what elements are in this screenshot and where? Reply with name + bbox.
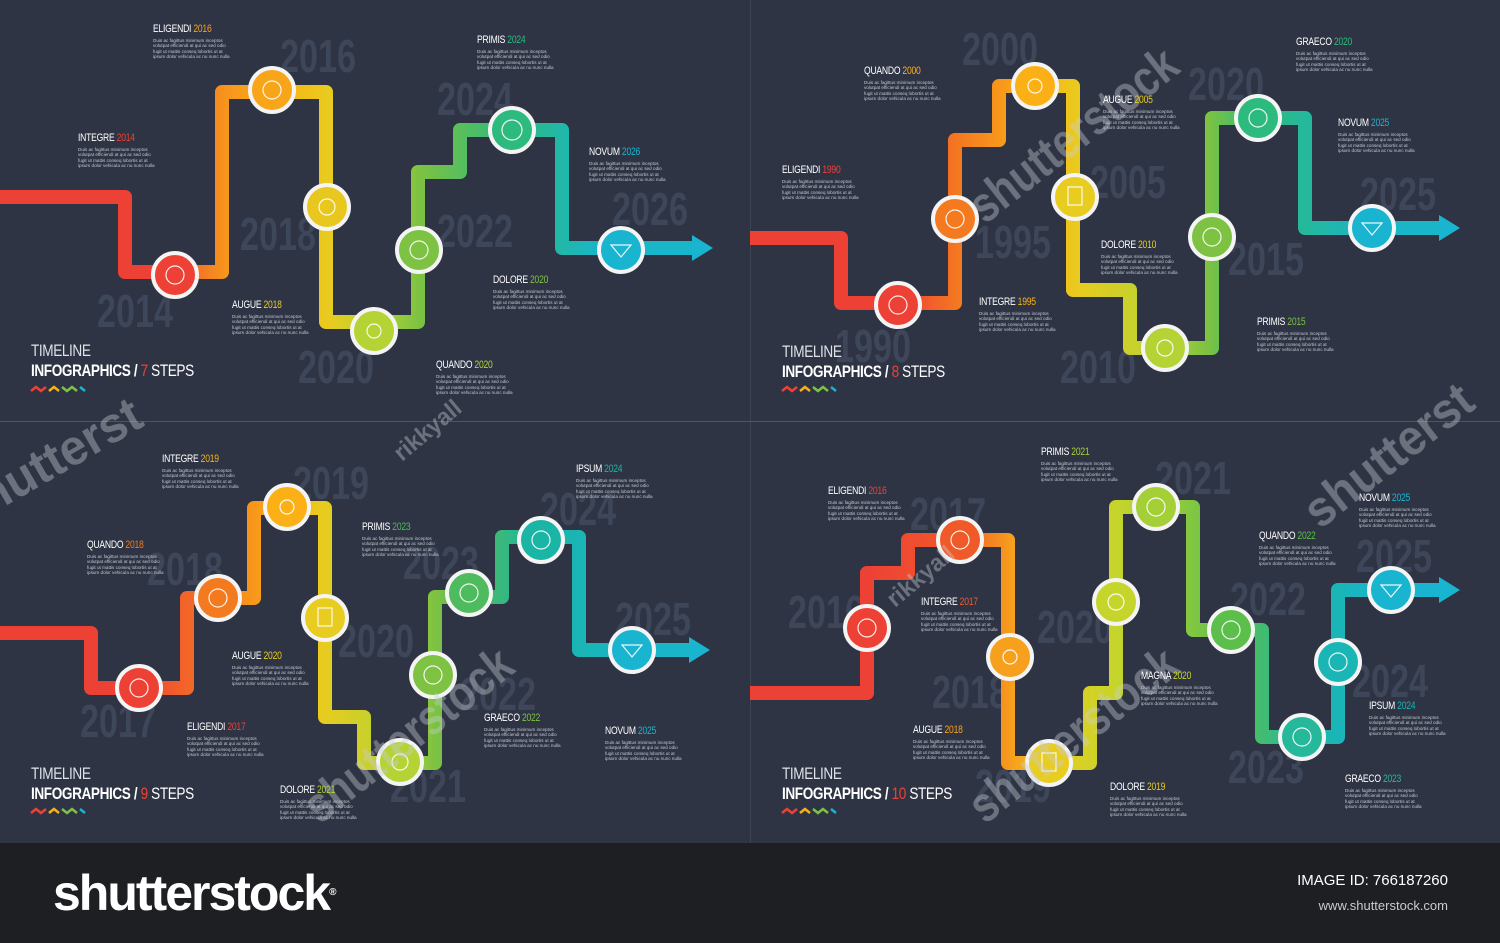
text: Duis ac fagittus minimum inceptos volutpat efficiendi at qui ac sed odio fugit ut mattis conseq lobortis ut at ipsum dolor vehicula ac nu nunc nulla xyxy=(1141,685,1218,706)
ghost years: 2023 xyxy=(1228,741,1304,793)
path: panel 4 timeline xyxy=(750,507,1460,763)
panel 3 text blocks xyxy=(87,453,682,820)
text: Duis ac fagittus minimum inceptos volutpat efficiendi at qui ac sed odio fugit ut mattis conseq lobortis ut at ipsum dolor vehicula ac nu nunc nulla xyxy=(232,314,309,335)
text: Duis ac fagittus minimum inceptos volutpat efficiendi at qui ac sed odio fugit ut mattis conseq lobortis ut at ipsum dolor vehicula ac nu nunc nulla xyxy=(1369,715,1446,736)
ghost years: 2005 xyxy=(1090,156,1166,208)
watermarks: shutterst xyxy=(1292,371,1485,539)
text: Duis ac fagittus minimum inceptos volutpat efficiendi at qui ac sed odio fugit ut mattis conseq lobortis ut at ipsum dolor vehicula ac nu nunc nulla xyxy=(1259,545,1336,566)
logo: shutterstock® xyxy=(53,865,334,921)
circle icons xyxy=(130,79,1401,771)
ghost years: 2018 xyxy=(240,208,316,260)
panel titles xyxy=(31,341,952,803)
panel 1 text blocks xyxy=(78,23,666,395)
text: AUGUE 2018 xyxy=(232,299,282,311)
ghost years: 2020 xyxy=(298,341,374,393)
text: Duis ac fagittus minimum inceptos volutpat efficiendi at qui ac sed odio fugit ut mattis conseq lobortis ut at ipsum dolor vehicula ac nu nunc nulla xyxy=(484,727,561,748)
ghost years: 2026 xyxy=(612,183,688,235)
text: IPSUM 2024 xyxy=(576,463,622,475)
text: Duis ac fagittus minimum inceptos volutpat efficiendi at qui ac sed odio fugit ut mattis conseq lobortis ut at ipsum dolor vehicula ac nu nunc nulla xyxy=(1257,331,1334,352)
text: AUGUE 2018 xyxy=(913,724,963,736)
text: Duis ac fagittus minimum inceptos volutpat efficiendi at qui ac sed odio fugit ut mattis conseq lobortis ut at ipsum dolor vehicula ac nu nunc nulla xyxy=(605,740,682,761)
ghost years: 2018 xyxy=(147,543,223,595)
watermarks: shutterstock xyxy=(292,636,524,834)
ghost years: 2021 xyxy=(1155,452,1231,504)
text: PRIMIS 2021 xyxy=(1041,446,1089,458)
ghost years: 2025 xyxy=(1356,530,1432,582)
ghost years: 2022 xyxy=(1230,573,1306,625)
text: DOLORE 2021 xyxy=(280,784,335,796)
ghost years: 2018 xyxy=(932,666,1008,718)
ghost years: 2025 xyxy=(1360,168,1436,220)
text: Duis ac fagittus minimum inceptos volutpat efficiendi at qui ac sed odio fugit ut mattis conseq lobortis ut at ipsum dolor vehicula ac nu nunc nulla xyxy=(1296,51,1373,72)
image id: IMAGE ID: 766187260 xyxy=(1297,872,1448,889)
text: ELIGENDI 2016 xyxy=(153,23,212,35)
ghost years: 2023 xyxy=(403,537,479,589)
text: NOVUM 2026 xyxy=(589,146,640,158)
ghost years: 2024 xyxy=(1352,655,1428,707)
ghost years: 2017 xyxy=(80,695,156,747)
ghost years xyxy=(80,23,1436,812)
text: GRAECO 2022 xyxy=(484,712,540,724)
ghost years: 2025 xyxy=(615,593,691,645)
text: INTEGRE 2019 xyxy=(162,453,219,465)
step circles xyxy=(117,64,1413,785)
footer bar xyxy=(0,843,1500,943)
text: TIMELINE xyxy=(782,764,842,783)
website: www.shutterstock.com xyxy=(1319,898,1448,913)
ghost years: 2016 xyxy=(280,30,356,82)
ghost years: 2024 xyxy=(540,483,616,535)
watermarks: rikkyall xyxy=(882,540,960,613)
text: Duis ac fagittus minimum inceptos volutpat efficiendi at qui ac sed odio fugit ut mattis conseq lobortis ut at ipsum dolor vehicula ac nu nunc nulla xyxy=(87,554,164,575)
text: NOVUM 2025 xyxy=(1359,492,1410,504)
ghost years: 2021 xyxy=(390,760,466,812)
text: Duis ac fagittus minimum inceptos volutpat efficiendi at qui ac sed odio fugit ut mattis conseq lobortis ut at ipsum dolor vehicula ac nu nunc nulla xyxy=(589,161,666,182)
ghost years: 1995 xyxy=(975,216,1051,268)
text: AUGUE 2020 xyxy=(232,650,282,662)
ghost years: 2000 xyxy=(962,23,1038,75)
path: panel 3 timeline xyxy=(0,508,710,763)
text: TIMELINE xyxy=(31,341,91,360)
path: panel 1 timeline xyxy=(0,92,713,322)
text: Duis ac fagittus minimum inceptos volutpat efficiendi at qui ac sed odio fugit ut mattis conseq lobortis ut at ipsum dolor vehicula ac nu nunc nulla xyxy=(153,38,230,59)
text: TIMELINE xyxy=(782,342,842,361)
text: Duis ac fagittus minimum inceptos volutpat efficiendi at qui ac sed odio fugit ut mattis conseq lobortis ut at ipsum dolor vehicula ac nu nunc nulla xyxy=(1041,461,1118,482)
text: NOVUM 2025 xyxy=(605,725,656,737)
text: QUANDO 2018 xyxy=(87,539,144,551)
text: INTEGRE 1995 xyxy=(979,296,1036,308)
text: MAGNA 2020 xyxy=(1141,670,1191,682)
text: Duis ac fagittus minimum inceptos volutpat efficiendi at qui ac sed odio fugit ut mattis conseq lobortis ut at ipsum dolor vehicula ac nu nunc nulla xyxy=(78,147,155,168)
text: Duis ac fagittus minimum inceptos volutpat efficiendi at qui ac sed odio fugit ut mattis conseq lobortis ut at ipsum dolor vehicula ac nu nunc nulla xyxy=(828,500,905,521)
ghost years: 2020 xyxy=(1037,601,1113,653)
ghost years: 2022 xyxy=(460,668,536,720)
ghost years: 2010 xyxy=(1060,341,1136,393)
path: panel 2 timeline xyxy=(750,86,1460,348)
text: INFOGRAPHICS / 10 STEPS xyxy=(782,784,952,803)
ghost years: 2020 xyxy=(1188,58,1264,110)
text: Duis ac fagittus minimum inceptos volutpat efficiendi at qui ac sed odio fugit ut mattis conseq lobortis ut at ipsum dolor vehicula ac nu nunc nulla xyxy=(913,739,990,760)
text: INFOGRAPHICS / 9 STEPS xyxy=(31,784,194,803)
text: Duis ac fagittus minimum inceptos volutpat efficiendi at qui ac sed odio fugit ut mattis conseq lobortis ut at ipsum dolor vehicula ac nu nunc nulla xyxy=(1101,254,1178,275)
ghost years: 2017 xyxy=(910,488,986,540)
text: DOLORE 2020 xyxy=(493,274,548,286)
ghost years: 2016 xyxy=(788,586,864,638)
text: Duis ac fagittus minimum inceptos volutpat efficiendi at qui ac sed odio fugit ut mattis conseq lobortis ut at ipsum dolor vehicula ac nu nunc nulla xyxy=(436,374,513,395)
text: Duis ac fagittus minimum inceptos volutpat efficiendi at qui ac sed odio fugit ut mattis conseq lobortis ut at ipsum dolor vehicula ac nu nunc nulla xyxy=(1338,132,1415,153)
text: INFOGRAPHICS / 8 STEPS xyxy=(782,362,945,381)
text: Duis ac fagittus minimum inceptos volutpat efficiendi at qui ac sed odio fugit ut mattis conseq lobortis ut at ipsum dolor vehicula ac nu nunc nulla xyxy=(782,179,859,200)
text: Duis ac fagittus minimum inceptos volutpat efficiendi at qui ac sed odio fugit ut mattis conseq lobortis ut at ipsum dolor vehicula ac nu nunc nulla xyxy=(864,80,941,101)
watermarks: shutterstock xyxy=(957,636,1189,834)
ghost years: 2015 xyxy=(1228,233,1304,285)
ghost years: 2014 xyxy=(97,285,173,337)
text: ELIGENDI 2017 xyxy=(187,721,246,733)
text: Duis ac fagittus minimum inceptos volutpat efficiendi at qui ac sed odio fugit ut mattis conseq lobortis ut at ipsum dolor vehicula ac nu nunc nulla xyxy=(576,478,653,499)
title wave marks xyxy=(31,387,836,813)
text: IPSUM 2024 xyxy=(1369,700,1415,712)
text: Duis ac fagittus minimum inceptos volutpat efficiendi at qui ac sed odio fugit ut mattis conseq lobortis ut at ipsum dolor vehicula ac nu nunc nulla xyxy=(162,468,239,489)
text: Duis ac fagittus minimum inceptos volutpat efficiendi at qui ac sed odio fugit ut mattis conseq lobortis ut at ipsum dolor vehicula ac nu nunc nulla xyxy=(979,311,1056,332)
text: PRIMIS 2015 xyxy=(1257,316,1305,328)
text: Duis ac fagittus minimum inceptos volutpat efficiendi at qui ac sed odio fugit ut mattis conseq lobortis ut at ipsum dolor vehicula ac nu nunc nulla xyxy=(362,536,439,557)
text: GRAECO 2020 xyxy=(1296,36,1352,48)
text: INTEGRE 2017 xyxy=(921,596,978,608)
text: INTEGRE 2014 xyxy=(78,132,135,144)
ghost years: 2019 xyxy=(293,457,369,509)
text: PRIMIS 2023 xyxy=(362,521,410,533)
text: Duis ac fagittus minimum inceptos volutpat efficiendi at qui ac sed odio fugit ut mattis conseq lobortis ut at ipsum dolor vehicula ac nu nunc nulla xyxy=(187,736,264,757)
text: QUANDO 2000 xyxy=(864,65,921,77)
panel 4 text blocks xyxy=(828,446,1446,817)
watermarks: rikkyall xyxy=(389,394,467,467)
ghost years: 2019 xyxy=(975,760,1051,812)
text: DOLORE 2010 xyxy=(1101,239,1156,251)
ghost years: 1990 xyxy=(835,320,911,372)
text: ELIGENDI 2016 xyxy=(828,485,886,497)
ghost years: 2020 xyxy=(338,615,414,667)
text: PRIMIS 2024 xyxy=(477,34,525,46)
panel 2 text blocks xyxy=(782,36,1415,352)
text: QUANDO 2020 xyxy=(436,359,493,371)
text: Duis ac fagittus minimum inceptos volutpat efficiendi at qui ac sed odio fugit ut mattis conseq lobortis ut at ipsum dolor vehicula ac nu nunc nulla xyxy=(493,289,570,310)
text: ELIGENDI 1990 xyxy=(782,164,840,176)
text: Duis ac fagittus minimum inceptos volutpat efficiendi at qui ac sed odio fugit ut mattis conseq lobortis ut at ipsum dolor vehicula ac nu nunc nulla xyxy=(921,611,998,632)
text: NOVUM 2025 xyxy=(1338,117,1389,129)
text: TIMELINE xyxy=(31,764,91,783)
ghost years: 2022 xyxy=(437,205,513,257)
text: AUGUE 2005 xyxy=(1103,94,1153,106)
ghost years: 2024 xyxy=(437,73,513,125)
text: Duis ac fagittus minimum inceptos volutpat efficiendi at qui ac sed odio fugit ut mattis conseq lobortis ut at ipsum dolor vehicula ac nu nunc nulla xyxy=(280,799,357,820)
text: INFOGRAPHICS / 7 STEPS xyxy=(31,361,194,380)
watermarks: shutterstock xyxy=(957,36,1189,234)
text: Duis ac fagittus minimum inceptos volutpat efficiendi at qui ac sed odio fugit ut mattis conseq lobortis ut at ipsum dolor vehicula ac nu nunc nulla xyxy=(477,49,554,70)
text: QUANDO 2022 xyxy=(1259,530,1316,542)
text: Duis ac fagittus minimum inceptos volutpat efficiendi at qui ac sed odio fugit ut mattis conseq lobortis ut at ipsum dolor vehicula ac nu nunc nulla xyxy=(1359,507,1436,528)
text: GRAECO 2023 xyxy=(1345,773,1401,785)
text: DOLORE 2019 xyxy=(1110,781,1165,793)
text: Duis ac fagittus minimum inceptos volutpat efficiendi at qui ac sed odio fugit ut mattis conseq lobortis ut at ipsum dolor vehicula ac nu nunc nulla xyxy=(232,665,309,686)
text: Duis ac fagittus minimum inceptos volutpat efficiendi at qui ac sed odio fugit ut mattis conseq lobortis ut at ipsum dolor vehicula ac nu nunc nulla xyxy=(1103,109,1180,130)
text: Duis ac fagittus minimum inceptos volutpat efficiendi at qui ac sed odio fugit ut mattis conseq lobortis ut at ipsum dolor vehicula ac nu nunc nulla xyxy=(1345,788,1422,809)
text: Duis ac fagittus minimum inceptos volutpat efficiendi at qui ac sed odio fugit ut mattis conseq lobortis ut at ipsum dolor vehicula ac nu nunc nulla xyxy=(1110,796,1187,817)
